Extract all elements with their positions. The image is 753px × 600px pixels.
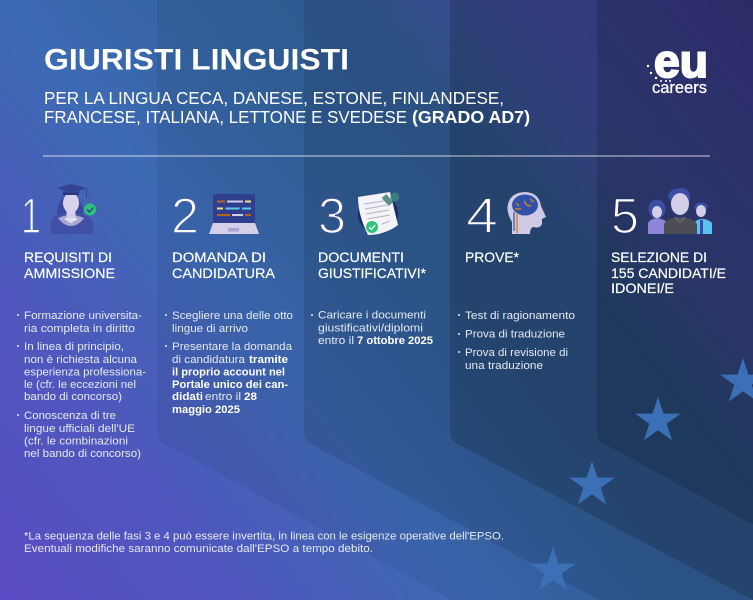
number 3: 3 bbox=[318, 188, 346, 244]
heading: AMMISSIONE bbox=[24, 265, 115, 281]
heading: REQUISITI DI bbox=[24, 249, 112, 265]
heading: IDONEI/E bbox=[611, 280, 674, 296]
number 4: 4 bbox=[466, 188, 498, 244]
heading: 155 CANDIDATI/E bbox=[611, 265, 726, 281]
footnote bbox=[24, 530, 504, 555]
decorative stars bbox=[530, 358, 753, 590]
bullet list bbox=[458, 310, 575, 372]
panel: step 3 documenti bbox=[311, 188, 433, 347]
bullet list: Prova di revisione di bbox=[465, 347, 568, 359]
subtitle: PER LA LINGUA CECA, DANESE, ESTONE, FINLANDESE, bbox=[44, 88, 504, 108]
bullet list: (cfr. le combinazioni bbox=[24, 436, 128, 448]
bullet list: maggio 2025 bbox=[172, 404, 240, 416]
heading: GIUSTIFICATIVI* bbox=[318, 265, 427, 281]
bullet list: nel bando di concorso) bbox=[24, 448, 141, 460]
bullet list: In linea di principio, bbox=[24, 341, 124, 353]
bullet list bbox=[17, 310, 146, 460]
bullet list: Conoscenza di tre bbox=[24, 410, 116, 422]
bullet list: giustificativi/diplomi bbox=[318, 322, 423, 334]
heading bbox=[611, 249, 726, 296]
bullet list: Caricare i documenti bbox=[318, 310, 426, 322]
heading bbox=[318, 249, 427, 281]
heading: SELEZIONE DI bbox=[611, 249, 707, 265]
bullet list: Scegliere una delle otto bbox=[172, 310, 293, 322]
bullet list: entro il bbox=[318, 335, 354, 347]
bullet list: esperienza professiona- bbox=[24, 366, 146, 378]
bullet list: Presentare la domanda bbox=[172, 341, 293, 353]
heading: DOMANDA DI bbox=[172, 249, 266, 265]
background chevron panels bbox=[157, 0, 753, 600]
title: GIURISTI LINGUISTI bbox=[44, 44, 349, 76]
number 2: 2 bbox=[171, 188, 199, 244]
heading: PROVE* bbox=[465, 249, 520, 265]
icon: graduate bbox=[51, 184, 96, 234]
bullet list: una traduzione bbox=[465, 360, 543, 372]
bullet list: entro il bbox=[205, 391, 241, 403]
bullet list: lingue ufficiali dell'UE bbox=[24, 423, 135, 435]
bullet list: ria completa in diritto bbox=[24, 323, 135, 335]
panel: step 5 selezione bbox=[611, 188, 726, 296]
bullet list: didati bbox=[172, 391, 203, 403]
icon: head with brain bbox=[508, 192, 546, 234]
bullet list: le (cfr. le eccezioni nel bbox=[24, 379, 136, 391]
number 1: 1 bbox=[21, 188, 41, 244]
heading bbox=[24, 249, 115, 281]
footnote: Eventuali modifiche saranno comunicate dall'EPSO a tempo debito. bbox=[24, 543, 373, 555]
panel: step 2 domanda bbox=[165, 188, 293, 416]
bullet list: 7 ottobre 2025 bbox=[357, 335, 433, 347]
bullet list: Formazione universita- bbox=[24, 310, 142, 322]
bullet list: tramite bbox=[249, 354, 288, 366]
bullet list: non è richiesta alcuna bbox=[24, 354, 138, 366]
bullet list: il proprio account nel bbox=[172, 366, 285, 378]
icon: group of people bbox=[648, 188, 712, 234]
subtitle bbox=[44, 88, 530, 127]
logo: EU careers: eu bbox=[654, 35, 708, 87]
header divider bbox=[43, 155, 710, 157]
bullet list: lingue di arrivo bbox=[172, 323, 248, 335]
bullet list: 28 bbox=[244, 391, 257, 403]
number 5: 5 bbox=[611, 188, 639, 244]
bullet list: bando di concorso) bbox=[24, 391, 122, 403]
bullet list: Prova di traduzione bbox=[465, 328, 565, 340]
heading bbox=[172, 249, 276, 281]
panel: step 4 prove bbox=[458, 188, 575, 372]
heading: DOCUMENTI bbox=[318, 249, 404, 265]
bullet list: Test di ragionamento bbox=[465, 310, 575, 322]
subtitle: FRANCESE, ITALIANA, LETTONE E SVEDESE bbox=[44, 107, 407, 127]
bullet list bbox=[311, 310, 433, 347]
bullet list bbox=[165, 310, 293, 416]
subtitle: (GRADO AD7) bbox=[412, 107, 530, 127]
panel: step 1 requisiti bbox=[17, 184, 146, 460]
bullet list: di candidatura bbox=[172, 354, 246, 366]
icon: document with stamp bbox=[358, 192, 400, 235]
logo: EU careers: careers bbox=[652, 79, 707, 97]
bullet list: Portale unico dei can- bbox=[172, 379, 288, 391]
icon: laptop bbox=[209, 194, 259, 234]
heading: CANDIDATURA bbox=[172, 265, 276, 281]
footnote: *La sequenza delle fasi 3 e 4 può essere invertita, in linea con le esigenze operative dell'EPSO. bbox=[24, 530, 504, 542]
